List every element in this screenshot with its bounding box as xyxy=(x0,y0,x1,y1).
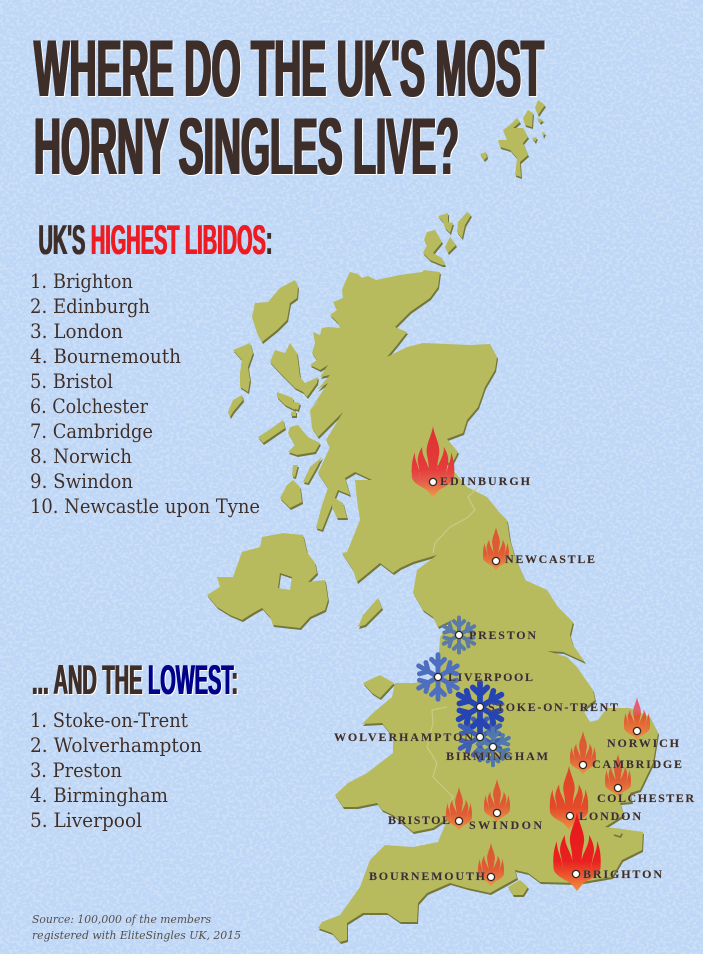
icon: flame Norwich xyxy=(624,697,650,740)
city labels: NORWICH xyxy=(607,736,680,750)
city labels: STOKE-ON-TRENT xyxy=(488,700,618,714)
city labels: SWINDON xyxy=(469,818,542,832)
list: lowest libidos: 2. Wolverhampton xyxy=(30,733,202,757)
city labels: LONDON xyxy=(579,809,641,823)
icon: snowflake Wolverhampton xyxy=(460,714,500,760)
icon: flame Cambridge xyxy=(570,731,596,774)
icon: flame Bristol xyxy=(446,787,472,830)
map of the UK and Ireland xyxy=(207,100,658,942)
city labels: BRISTOL xyxy=(388,813,450,827)
city labels: CAMBRIDGE xyxy=(592,757,682,771)
map: Orkney xyxy=(423,212,471,265)
list: highest libidos: 5. Bristol xyxy=(30,369,113,393)
icon: snowflake Stoke-on-Trent xyxy=(459,682,501,732)
list: lowest libidos xyxy=(30,708,202,832)
list: highest libidos: 3. London xyxy=(30,319,123,343)
city labels: LIVERPOOL xyxy=(448,670,533,684)
icon: flame Swindon xyxy=(484,779,510,822)
list: highest libidos: 8. Norwich xyxy=(30,444,132,468)
list: highest libidos: 1. Brighton xyxy=(30,269,133,293)
source note xyxy=(32,912,241,942)
map: Outer Hebrides xyxy=(228,280,298,417)
list: highest libidos xyxy=(30,269,260,518)
list: highest libidos: 7. Cambridge xyxy=(30,419,153,443)
city labels: WOLVERHAMPTON xyxy=(334,730,473,744)
heading: highest libidos: UK'S HIGHEST LIBIDOS: xyxy=(38,216,272,263)
city labels: BIRMINGHAM xyxy=(446,749,548,763)
city labels: EDINBURGH xyxy=(440,474,531,488)
list: lowest libidos: 5. Liverpool xyxy=(30,808,142,832)
list: highest libidos: 6. Colchester xyxy=(30,394,148,418)
city labels: NEWCASTLE xyxy=(505,552,595,566)
map: Isle of Sheppey xyxy=(612,828,622,836)
icon: snowflake Birmingham xyxy=(477,729,509,765)
list: highest libidos: 9. Swindon xyxy=(30,469,133,493)
city labels: COLCHESTER xyxy=(597,791,694,805)
city labels xyxy=(334,474,694,883)
map: Northern Ireland xyxy=(207,533,328,628)
list: highest libidos: 4. Bournemouth xyxy=(30,344,181,368)
source note: Source: 100,000 of the members xyxy=(32,912,211,926)
map: Anglesey xyxy=(363,675,394,698)
icon: flame Colchester xyxy=(605,754,631,797)
map: Shetland xyxy=(480,100,545,177)
list: highest libidos: 10. Newcastle upon Tyne xyxy=(30,494,260,518)
city labels: PRESTON xyxy=(469,628,536,642)
icon: flame Brighton xyxy=(553,812,601,891)
icon: flame London xyxy=(550,766,588,830)
city markers xyxy=(429,478,641,881)
city labels: BRIGHTON xyxy=(583,867,662,881)
icon: flame Edinburgh xyxy=(412,426,454,497)
city labels: BOURNEMOUTH xyxy=(369,869,486,883)
map: Isle of Wight xyxy=(508,880,528,895)
map: Inner Hebrides xyxy=(258,343,347,518)
map: Isle of Man xyxy=(358,598,382,627)
list: lowest libidos: 4. Birmingham xyxy=(30,783,168,807)
icon: snowflake Preston xyxy=(444,617,474,653)
heading: lowest libidos: ... AND THE LOWEST: xyxy=(32,656,238,703)
list: lowest libidos: 1. Stoke-on-Trent xyxy=(30,708,188,732)
icon: snowflake Liverpool xyxy=(419,655,457,699)
icon: flame Bournemouth xyxy=(478,843,504,886)
list: lowest libidos: 3. Preston xyxy=(30,758,122,782)
source note: registered with EliteSingles UK, 2015 xyxy=(32,928,241,942)
list: highest libidos: 2. Edinburgh xyxy=(30,294,150,318)
title xyxy=(34,24,544,192)
icon: flame Newcastle xyxy=(483,527,509,570)
map: Great Britain mainland xyxy=(310,270,658,942)
